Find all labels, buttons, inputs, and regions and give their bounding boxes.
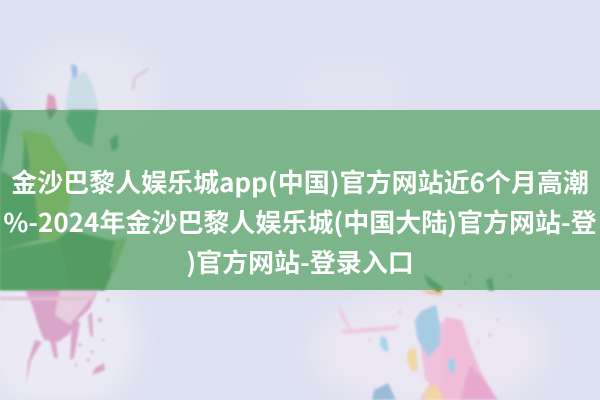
title line 2: %-2024年金沙巴黎人娱乐城(中国大陆)官方网站-登	[3, 203, 597, 240]
title line 3: )官方网站-登录入口	[186, 243, 414, 280]
green title band	[0, 110, 600, 290]
blue and yellow crystals	[415, 305, 440, 358]
upper left crystals	[0, 64, 148, 145]
bottom center splash	[338, 290, 498, 400]
splash strokes in band	[424, 274, 511, 292]
bottom left pink splatter	[25, 290, 110, 384]
crystals and green wash in band zone	[0, 110, 127, 290]
title line 1: 金沙巴黎人娱乐城app(中国)官方网站近6个月高潮	[11, 163, 589, 200]
